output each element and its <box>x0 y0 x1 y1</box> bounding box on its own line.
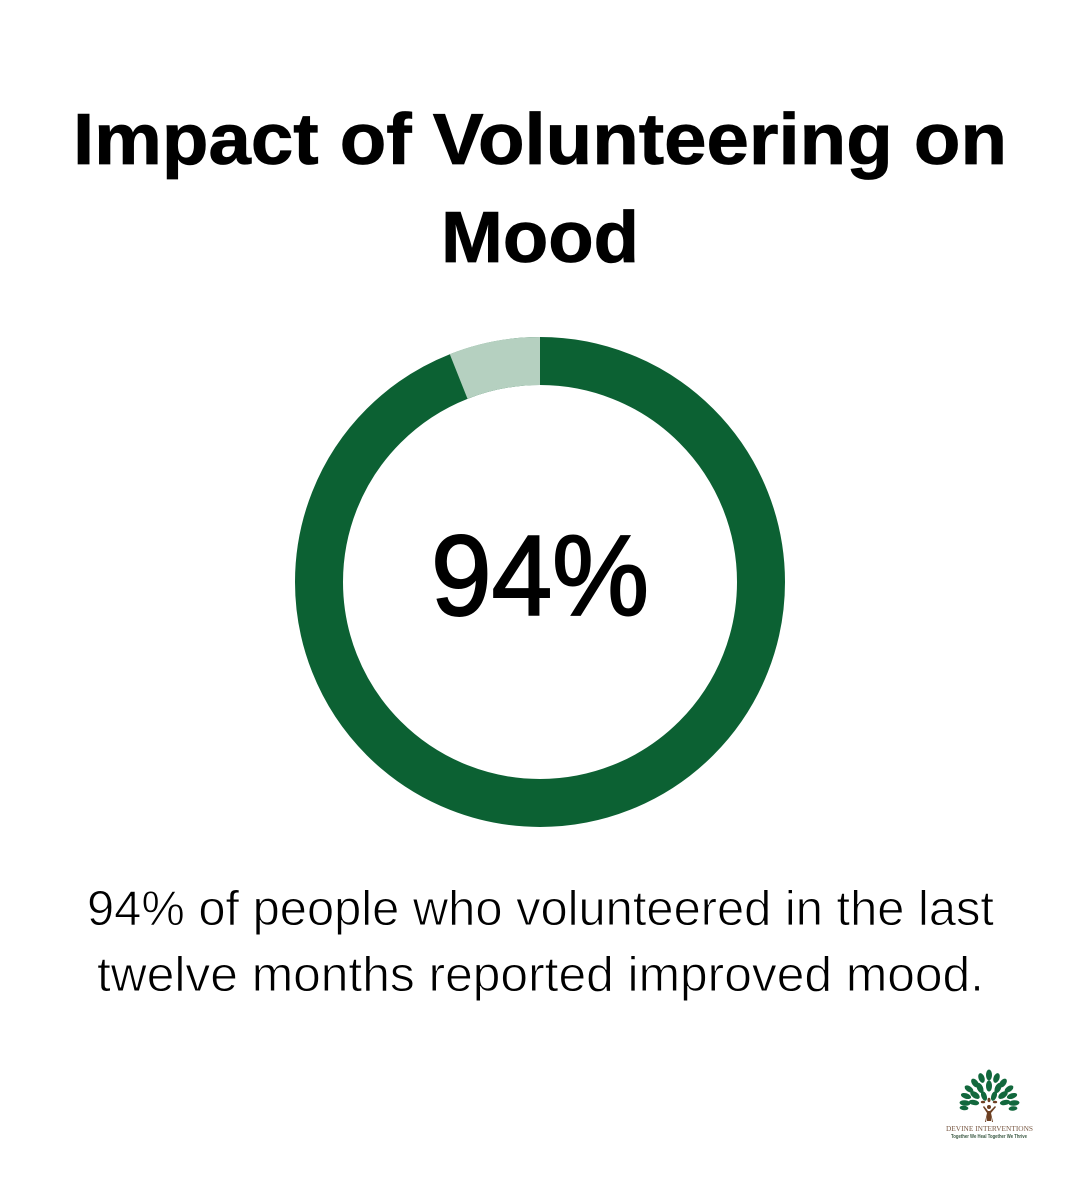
icon: tree leaves <box>959 1070 1020 1111</box>
chart ring: remaining 6% segment <box>450 337 540 399</box>
donut chart <box>319 337 761 803</box>
description text <box>87 882 994 1002</box>
logo tagline: Together We Heal Together We Thrive <box>951 1134 1027 1140</box>
logo: Devine Interventions <box>946 1070 1033 1140</box>
description text: 94% of people who volunteered in the last <box>87 882 994 936</box>
central value: 94% <box>431 513 649 640</box>
title: Mood <box>441 198 639 278</box>
description text: twelve months reported improved mood. <box>97 948 984 1002</box>
logo name: DEVINE INTERVENTIONS <box>946 1124 1033 1133</box>
title <box>73 100 1007 278</box>
chart ring: 94% segment <box>319 361 761 803</box>
icon: tree trunk figure <box>981 1098 997 1122</box>
title: Impact of Volunteering on <box>73 100 1007 180</box>
